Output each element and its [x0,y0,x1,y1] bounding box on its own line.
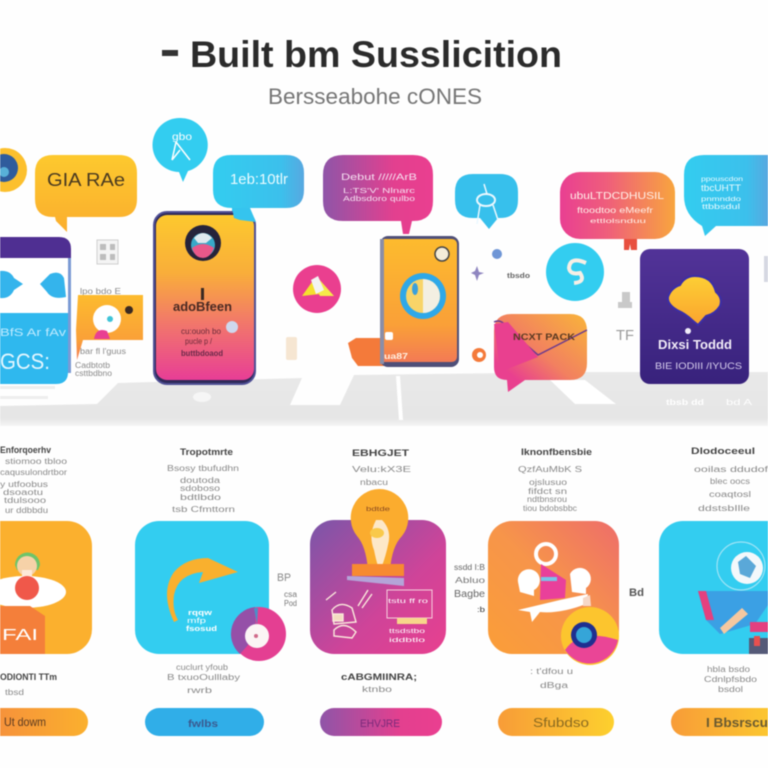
line art tools [326,590,372,638]
description: tiou bdobsbbc [523,504,577,513]
phone text: cu:ouoh bo [181,327,222,336]
arrow icon [167,558,238,622]
speech bubble: pink orange: ftoodtoo eMeefr [577,206,653,215]
description: ddstsbIlle [698,504,751,513]
caption: cABGMlINRA; [341,672,417,682]
speech bubble: blue right [684,155,768,236]
speech bubble: purple pink: Debut /////ArB [341,172,417,182]
left phone [0,237,71,384]
small floating icons: tbsdo [507,273,530,280]
description [518,465,582,513]
speech bubble: purple pink: L:TS'V' Nlnarc [343,188,416,195]
description: dsoaotu [3,488,43,497]
description [694,465,768,513]
text: note below camera card: Cadbtotb [75,361,111,370]
caption: bsdol [718,685,743,694]
heading: Iknonfbensbie [521,447,592,457]
center phone two [380,236,459,367]
side note: csa [284,590,298,599]
donut chart [231,607,286,661]
speech bubble: pink orange: ettlolsnduu [590,219,646,225]
envelope bubble: NCXT PACK [513,332,576,342]
pill button [145,708,264,736]
heading: Enforqoerhv [0,445,51,455]
caption: cuclurt yfoub [176,663,229,672]
center phone one [154,208,256,384]
description: y utfoobus [0,480,48,489]
description: sdoboso [180,484,221,493]
description: ojslusuo [529,478,568,487]
card [135,521,269,654]
caption: rwrb [187,686,213,695]
card text: rqqw [188,610,213,617]
heading: Dlodoceeul [691,446,755,456]
avatar [185,225,221,261]
pill button: I Bbsrscu [706,715,768,730]
caption: dBga [540,681,569,690]
caption [704,665,758,694]
description: Velu:kX3E [352,465,411,474]
description: bdtlbdo [180,493,222,502]
speech bubble: small blue with figure [455,174,518,229]
side note: Abluo [455,576,486,585]
small floating icons [471,249,530,362]
caption: Cdnlpfsbdo [704,675,758,684]
caption: hbla bsdo [707,665,751,674]
heading: Tropotmrte [180,447,233,457]
speech bubble: blue right: pnmnddo [701,197,742,203]
figure illustration [0,553,66,654]
caption: ktnbo [362,685,393,694]
side grey icons: TF [616,327,634,344]
description: blec oocs [710,477,750,486]
card [0,521,92,654]
side note: BP [277,572,291,584]
pill button: Ut dowm [4,715,46,729]
caption [341,672,417,694]
description: coaqtosl [709,490,751,499]
heading: EBHGJET [352,448,410,458]
caption: B txuoOulllaby [167,673,240,682]
side grey icons [616,292,634,344]
icon: bulb base [347,564,404,586]
pill button [320,708,442,736]
left phone: GCS: [0,349,50,374]
description [0,457,68,515]
floor platform [0,372,768,426]
caption [530,667,573,690]
panel: column two [135,447,298,736]
side note: Bd [629,587,644,599]
description: ndtbnsrou [527,495,567,504]
caption: : t'dfou u [530,667,573,676]
side note: ssdd I:B [454,563,485,572]
icon: pink circle [293,265,341,313]
caption: ODIONTI TTm [0,672,57,682]
icon: eye ball [561,607,619,665]
purple card: BIE IODIII /IYUCS [655,361,742,371]
phone text: pucle p / [185,337,213,346]
blue ring dial [400,273,446,319]
phone text [173,288,238,358]
card text [186,610,217,633]
pill button [671,708,768,736]
basket illustration [698,542,768,654]
pill button: EHVJRE [360,718,400,730]
description: stiomoo tbloo [5,457,68,466]
icon: blue circle swirl [546,243,604,301]
phone text: buttbdoaod [181,349,223,358]
envelope bubble [494,314,587,392]
speech bubble: round teal icon [152,118,208,182]
caption [167,663,240,695]
icon: lightbulb [351,489,408,570]
purple card [640,249,749,384]
card [488,521,619,654]
pill button: Sfubdso [533,715,589,730]
description: nbacu [360,478,388,487]
card [659,521,768,654]
description [352,465,411,487]
center phone two: ua87 [384,352,409,361]
icon: lightbulb: bdtde [366,507,391,513]
description: caqusulondrtbor [0,468,67,477]
description: ur ddbbdu [5,506,48,515]
hands illustration [518,544,591,622]
yellow blob [668,276,721,334]
figure illustration: FAI [2,627,38,644]
side note [277,572,298,608]
panel: column four [488,447,644,736]
speech bubble: yellow [35,155,137,232]
screen panel right: tstu ff ro [388,599,429,605]
floor platform: tbsb dd [666,398,704,407]
speech bubble: purple pink [323,155,433,234]
purple card: Dixsi Toddd [658,337,732,352]
side note: :b [477,607,485,614]
panel: column one: tbsd [5,688,24,697]
speech bubble: blue [213,155,304,220]
description: Bsosy tbufudhn [167,464,239,473]
card text: mfp [187,618,206,625]
panel: column five [659,446,768,736]
description: tsb Cfmttorn [172,505,235,514]
screen panel right [387,590,432,644]
description [167,464,239,514]
text: note below camera card [75,347,126,378]
pill button [0,708,88,736]
icon: badge top left [0,148,27,192]
pill button: fwlbs [188,719,219,730]
camera card [76,295,143,360]
speech bubble: yellow: GIA RAe [47,170,125,190]
pill button [498,708,614,736]
description: fifdct sn [528,487,567,496]
description: tdulsooo [4,496,47,505]
text: note above camera card: lpo bdo E [80,287,121,296]
speech bubble: blue right: ppouscdon [701,177,743,183]
orange chip [348,338,386,366]
text: note below camera card: csttbdbno [75,369,113,378]
right edge grey bar [764,256,768,282]
beige bar [286,337,297,360]
side note: Pod [284,599,297,608]
speech bubble: blue right: ttbbsdul [702,204,741,211]
speech bubble: blue right: tbcUHTT [701,183,742,193]
card text: fsosud [186,626,217,633]
phone text: adoBfeen [173,299,232,314]
side note [454,563,486,614]
side note: Bagbe [454,589,485,600]
subtitle: Bersseabohe cONES [268,84,482,109]
title: Built bm Susslicition [190,34,562,75]
screen panel right: iddbtlo [389,638,426,644]
speech bubble: pink orange: ubuLTDCDHUSIL [570,191,665,202]
description: ooilas ddudof [694,465,768,474]
panel: column one [0,445,92,736]
screen panel right: ttsdstbo [389,629,426,635]
panel: column three [310,448,486,736]
text: note below camera card: bar fl l'guus [80,347,126,356]
qr code icon [97,240,118,264]
floor platform: bd A [726,398,753,407]
speech bubble: purple pink: Adbsdoro qulbo [343,196,415,203]
card [310,520,446,654]
description: doutoda [180,476,221,485]
speech bubble: pink orange [560,172,675,250]
description: QzfAuMbK S [518,465,582,474]
speech bubble: blue: 1eb:10tlr [230,171,288,188]
speech bubble: round teal icon: gbo [172,132,193,143]
left phone: BfS Ar fAv [0,327,67,339]
